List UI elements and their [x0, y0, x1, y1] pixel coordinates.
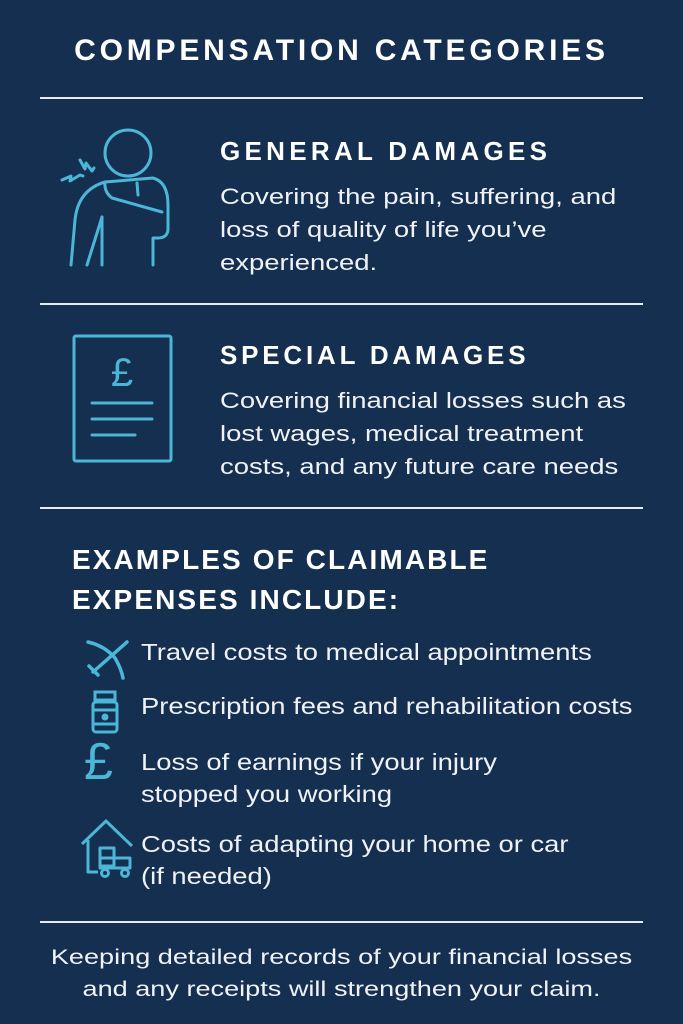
item: loss of earnings: stopped you working — [141, 781, 392, 807]
list: expenses — [81, 639, 632, 889]
text: special damages description: Covering financial losses such as — [220, 388, 626, 413]
item: loss of earnings: Loss of earnings if your injury — [141, 749, 497, 775]
footer note: Keeping detailed records of your financial losses — [51, 945, 632, 969]
title: COMPENSATION CATEGORIES — [74, 34, 609, 67]
footer note: and any receipts will strengthen your claim. — [83, 977, 600, 1001]
heading: examples — [72, 544, 489, 615]
text: general damages description: experienced. — [220, 250, 377, 275]
text: special damages description — [220, 388, 626, 479]
icon: house with truck — [81, 819, 133, 878]
item: prescription: Prescription fees and rehabilitation costs — [141, 693, 632, 719]
item: adapting home: Costs of adapting your home or car — [141, 831, 569, 857]
heading: special damages: SPECIAL DAMAGES — [220, 340, 529, 370]
text: special damages description: lost wages, medical treatment — [220, 421, 583, 446]
heading: general damages: GENERAL DAMAGES — [220, 136, 551, 166]
item: loss of earnings — [141, 749, 497, 807]
icon: invoice: £ — [111, 351, 133, 395]
footer note — [51, 945, 632, 1001]
heading: examples: EXAMPLES OF CLAIMABLE — [72, 544, 489, 575]
item: travel: Travel costs to medical appointments — [141, 639, 592, 665]
item: adapting home: (if needed) — [141, 863, 272, 889]
icon: injured person — [60, 128, 170, 266]
item: adapting home — [141, 831, 569, 889]
heading: examples: EXPENSES INCLUDE: — [72, 584, 400, 615]
icon: pound: £ — [84, 733, 113, 791]
text: general damages description: loss of quality of life you’ve — [220, 217, 547, 242]
text: special damages description: costs, and any future care needs — [220, 454, 618, 479]
text: general damages description — [220, 184, 616, 275]
text: general damages description: Covering the pain, suffering, and — [220, 184, 616, 209]
icon: plane — [86, 640, 129, 680]
icon: invoice — [72, 334, 172, 462]
icon: medicine bottle — [92, 690, 118, 734]
